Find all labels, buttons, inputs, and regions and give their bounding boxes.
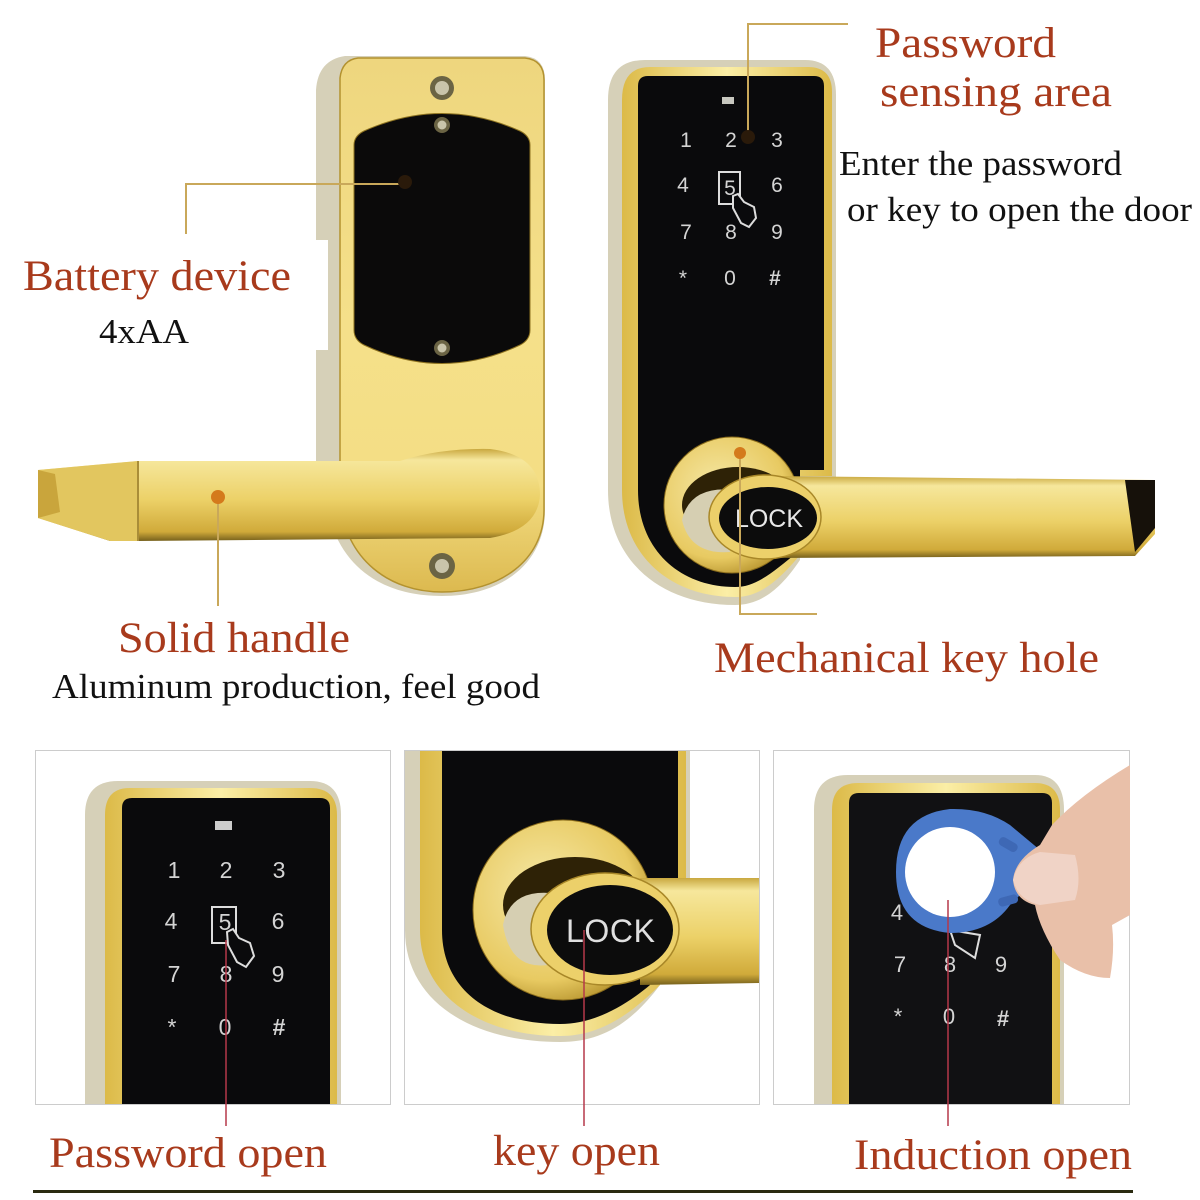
keypad: 7 [680, 221, 692, 244]
label: induction open: Induction open [854, 1132, 1132, 1179]
panel: password open: 7 [168, 961, 180, 987]
keypad: 2 [725, 129, 737, 152]
icon: hand [1013, 765, 1130, 978]
label: key open: key open [493, 1128, 660, 1175]
lock front plate [608, 60, 836, 605]
callout line: battery device [186, 175, 412, 234]
panel: password open: 8 [220, 961, 232, 987]
heading: battery device: Battery device [23, 253, 291, 300]
keypad: 4 [677, 174, 689, 197]
panel: password open: 1 [168, 857, 180, 883]
panel: induction open: 4 [891, 900, 903, 925]
panel: password open: 3 [273, 857, 285, 883]
callout line: solid handle [211, 490, 225, 606]
text: enter the password: or key to open the door [847, 190, 1192, 229]
keypad [677, 97, 783, 290]
heading: solid handle: Solid handle [118, 615, 350, 662]
keypad: 9 [771, 221, 783, 244]
heading: password sensing area: Password [875, 20, 1056, 67]
callout line: key hole [734, 447, 817, 614]
solid handle [38, 449, 540, 541]
panel: password open: 0 [219, 1014, 231, 1040]
lever handle: LOCK [735, 505, 803, 533]
heading: password sensing area: sensing area [880, 69, 1112, 116]
panel: password open: 4 [165, 908, 178, 934]
keypad: # [769, 267, 781, 290]
panel: password open: 6 [272, 908, 284, 934]
panel: induction open: 9 [995, 952, 1007, 977]
panel: induction open: 8 [944, 952, 956, 977]
keypad: 5 [724, 177, 736, 200]
keypad: 6 [771, 174, 783, 197]
panel: induction open: 7 [894, 952, 906, 977]
heading: mechanical key hole: Mechanical key hole [714, 635, 1099, 682]
callout line: password sensing [741, 24, 848, 144]
panel: password open: 9 [272, 961, 284, 987]
panel: induction open [774, 750, 1130, 1126]
panel: key open: LOCK [566, 913, 655, 949]
panel: induction open: 0 [943, 1004, 955, 1029]
text: 4xAA: 4xAA [99, 312, 190, 351]
keypad: 0 [724, 267, 736, 290]
panel: induction open: * [894, 1004, 903, 1029]
label: password open: Password open [49, 1130, 327, 1177]
text: aluminum: Aluminum production, feel good [52, 667, 541, 706]
panel: password open: # [273, 1014, 286, 1040]
panel: password open: 5 [219, 909, 231, 935]
keypad: 3 [771, 129, 783, 152]
lever handle [664, 437, 1155, 573]
heading: password sensing area [875, 20, 1112, 116]
text: enter the password: Enter the password [839, 144, 1123, 183]
battery cover [354, 76, 530, 579]
keypad: 8 [725, 221, 737, 244]
panel: induction open: # [997, 1006, 1009, 1031]
panel: password open [36, 750, 390, 1126]
panel: password open: * [168, 1014, 177, 1040]
icon: key fob [896, 809, 1040, 933]
keypad: * [679, 267, 687, 290]
lock back plate [316, 56, 545, 596]
keypad: 1 [680, 129, 692, 152]
text: enter the password [839, 144, 1192, 229]
panel: password open: 2 [220, 857, 232, 883]
panel: key open [404, 750, 760, 1126]
